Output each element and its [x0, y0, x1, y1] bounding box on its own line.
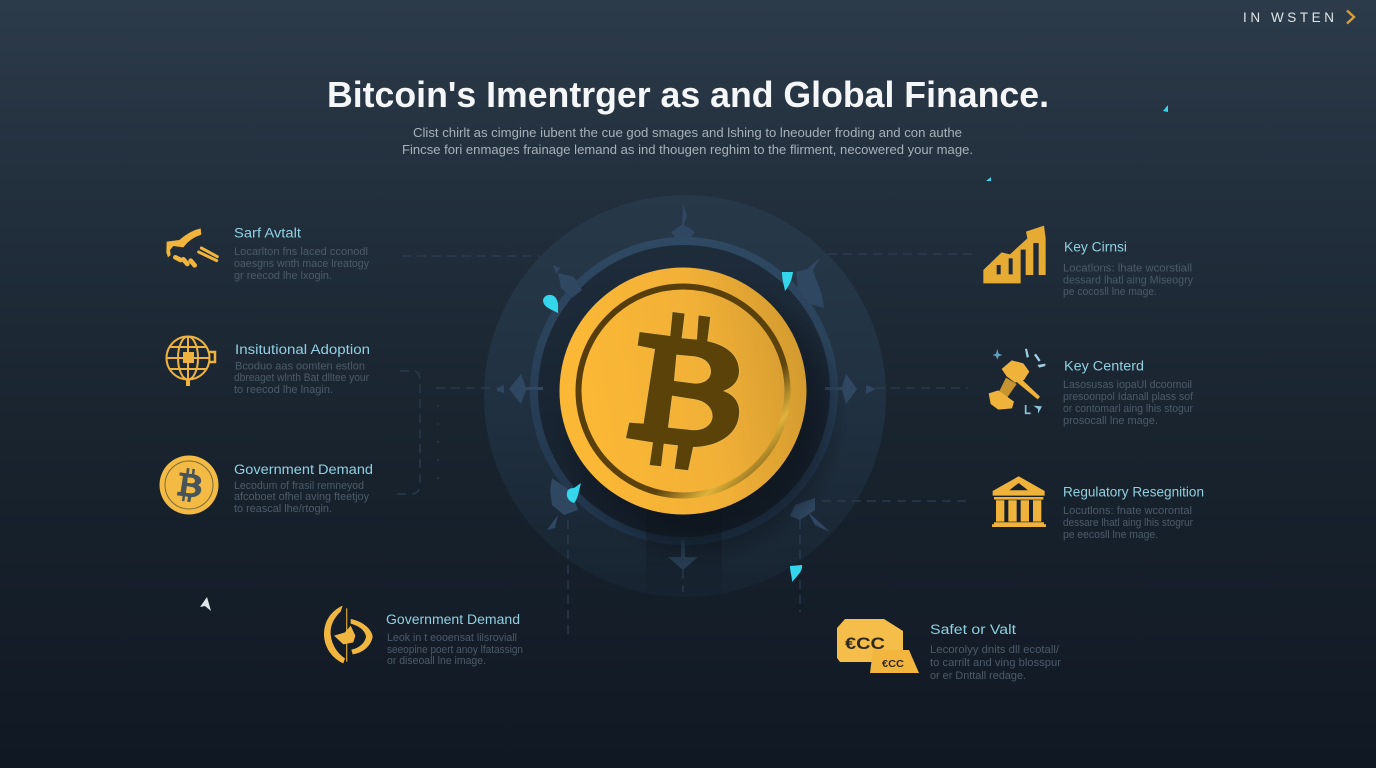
heading: Key Centerd — [1064, 358, 1144, 374]
description — [234, 480, 369, 515]
white pointer marker — [200, 597, 211, 611]
description: dbreaget wlnth Bat dlltee your — [234, 372, 369, 384]
icon: handshake — [166, 228, 217, 265]
description: Locutlons: fnate wcorontal — [1063, 505, 1192, 517]
description: Lecorolyy dnits dll ecotall/ — [930, 644, 1060, 656]
description: oaesgns wnth mace lreatogy — [234, 258, 369, 270]
description — [1063, 379, 1194, 427]
description — [1063, 262, 1193, 298]
heading: Key Cirnsi — [1064, 240, 1127, 254]
item: Government Demand (left) — [160, 456, 373, 515]
coin inner rim — [578, 286, 788, 496]
description: Bcoduo aas oomten estlon — [235, 360, 365, 372]
description: dessare lhatl aing lhis stogrur — [1063, 517, 1193, 529]
icon: rising chart — [983, 226, 1046, 283]
heading: Government Demand — [234, 462, 373, 477]
description: dessard lhatl aing Miseogry — [1063, 274, 1193, 286]
description: to reecod lhe lnagin. — [234, 384, 333, 396]
item: Safet or Valt — [837, 619, 1061, 682]
item: Insitutional Adoption — [166, 336, 370, 396]
bitcoin symbol — [626, 312, 739, 471]
description: Lasosusas iopaUl dcoomoil — [1063, 379, 1192, 391]
heading: Regulatory Resegnition — [1063, 484, 1204, 500]
description — [234, 360, 369, 396]
description — [387, 632, 523, 667]
icon: bank building — [992, 476, 1046, 527]
cyan accent markers — [543, 105, 1168, 582]
coin — [560, 268, 806, 514]
description: prosocall lne mage. — [1063, 415, 1158, 427]
icon: bitcoin coin — [160, 456, 218, 514]
description: seeopine poert anoy lfatassign — [387, 644, 523, 656]
item: Key Centerd — [989, 349, 1194, 427]
heading: Government Demand — [386, 612, 520, 627]
icon: gold bars — [837, 619, 919, 673]
outer disc — [484, 195, 886, 597]
icon: gavel — [989, 349, 1045, 414]
description: presoonpol Idanall plass sof — [1063, 391, 1194, 403]
coin shadow — [556, 272, 848, 564]
heading: Sarf Avtalt — [234, 226, 301, 240]
subtitle — [402, 125, 973, 157]
description: Lecodum of frasil remneyod — [234, 480, 364, 492]
description: Locatlons: lhate wcorstiall — [1063, 262, 1192, 274]
item: Key Cirnsi — [983, 226, 1193, 298]
heading: Safet or Valt — [930, 622, 1016, 637]
title: Bitcoin's Imentrger as and Global Finance. — [327, 74, 1049, 115]
description: pe eecosll lne mage. — [1063, 529, 1158, 541]
description — [930, 644, 1061, 682]
subtitle: Clist chirlt as cimgine iubent the cue god smages and lshing to lneouder froding and con authe — [413, 125, 962, 140]
description: or er Dnttall redage. — [930, 670, 1026, 682]
description — [234, 246, 369, 282]
dashed connector lines — [396, 254, 975, 640]
ring ornaments — [497, 204, 876, 570]
heading: Insitutional Adoption — [235, 342, 370, 357]
description — [1063, 505, 1193, 541]
description: to carrilt and ving blosspur — [930, 657, 1061, 669]
description: or diseoall lne image. — [387, 655, 486, 667]
description: Leok in t eooensat lilsroviall — [387, 632, 517, 644]
description: pe cocosll lne mage. — [1063, 286, 1157, 298]
description: afcoboet ofhel aving fteetjoy — [234, 491, 369, 503]
description: or contomarl aing lhis stogur — [1063, 403, 1193, 415]
description: Locarlton fns laced cconodl — [234, 246, 368, 258]
description: gr reecod lhe lxogin. — [234, 270, 332, 282]
icon: crescent emblem — [324, 606, 373, 663]
description: to reascal lhe/rtogin. — [234, 503, 332, 515]
subtitle: Fincse fori enmages frainage lemand as ind thougen reghim to the flirment, necowered your mage. — [402, 142, 973, 157]
top-right nav label: IN WSTEN — [1243, 10, 1334, 25]
item: Sarf Avtalt — [166, 226, 369, 282]
icon: globe — [166, 336, 215, 386]
ring — [534, 241, 834, 541]
icon: gold bars: €CC — [845, 634, 885, 653]
inner dark field — [534, 241, 834, 541]
item: Government Demand (bottom) — [324, 606, 523, 667]
icon: gold bars: €CC — [882, 658, 904, 670]
item: Regulatory Resegnition — [992, 476, 1204, 541]
central bitcoin emblem — [484, 195, 886, 597]
